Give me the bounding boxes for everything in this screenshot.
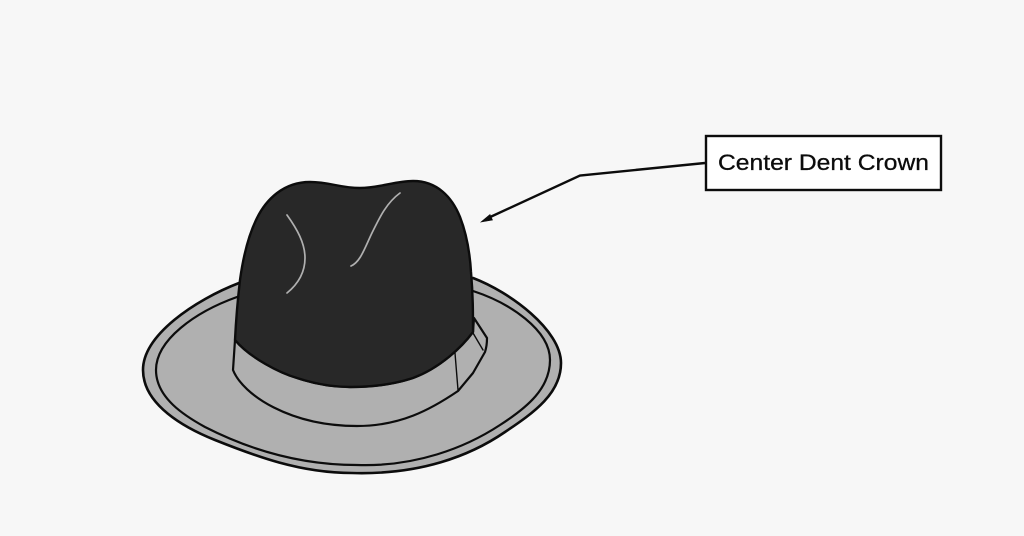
hat brim xyxy=(143,278,561,473)
hat crown xyxy=(235,181,473,387)
arrow: leader line to crown xyxy=(481,163,705,222)
crown crease left xyxy=(287,215,305,293)
crown crease right xyxy=(351,193,400,266)
callout text: Center Dent Crown xyxy=(718,150,929,175)
callout label box xyxy=(706,136,941,190)
hat band xyxy=(233,318,487,426)
illustration: fedora hat xyxy=(143,181,561,473)
